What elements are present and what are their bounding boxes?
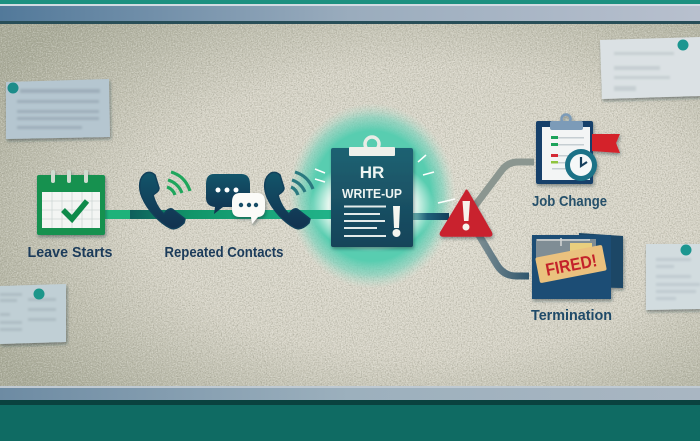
timeline line bbox=[105, 210, 449, 220]
note: bottom left bbox=[0, 284, 66, 344]
icon: phone with teal signal bbox=[265, 172, 313, 229]
teal wall bottom bbox=[0, 400, 700, 441]
icon: red warning triangle bbox=[440, 190, 492, 236]
note: right bbox=[646, 244, 700, 310]
clipboard text lines bbox=[344, 206, 386, 237]
branch: to termination bbox=[477, 232, 529, 276]
note: top left bbox=[6, 79, 110, 139]
clipboard exclamation bbox=[392, 206, 400, 237]
note: top right bbox=[600, 37, 700, 99]
label: job change: Job Change bbox=[532, 193, 607, 210]
icon: calendar bbox=[37, 170, 105, 235]
clock bbox=[565, 149, 597, 181]
branch: to job change bbox=[474, 162, 534, 207]
icon: white speech bubble bbox=[232, 193, 265, 224]
clipboard subtitle: WRITE-UP bbox=[342, 187, 402, 201]
icon: job change clipboard bbox=[536, 114, 620, 184]
icon: dark speech bubble bbox=[206, 174, 250, 214]
icon: HR write-up clipboard bbox=[315, 137, 455, 247]
top frame bbox=[0, 4, 700, 24]
green glow behind HR write-up bbox=[288, 103, 456, 289]
fired tag: FIRED! bbox=[544, 250, 599, 280]
clipboard title: HR bbox=[360, 163, 384, 182]
teal wall top bbox=[0, 0, 700, 5]
label: leave starts: Leave Starts bbox=[28, 244, 112, 261]
bottom frame bbox=[0, 386, 700, 405]
label: termination: Termination bbox=[531, 307, 612, 324]
icon: fired folder bbox=[532, 233, 623, 299]
icon: phone with green signal bbox=[140, 172, 190, 229]
red flag bbox=[592, 134, 620, 153]
label: repeated contacts: Repeated Contacts bbox=[164, 244, 284, 261]
